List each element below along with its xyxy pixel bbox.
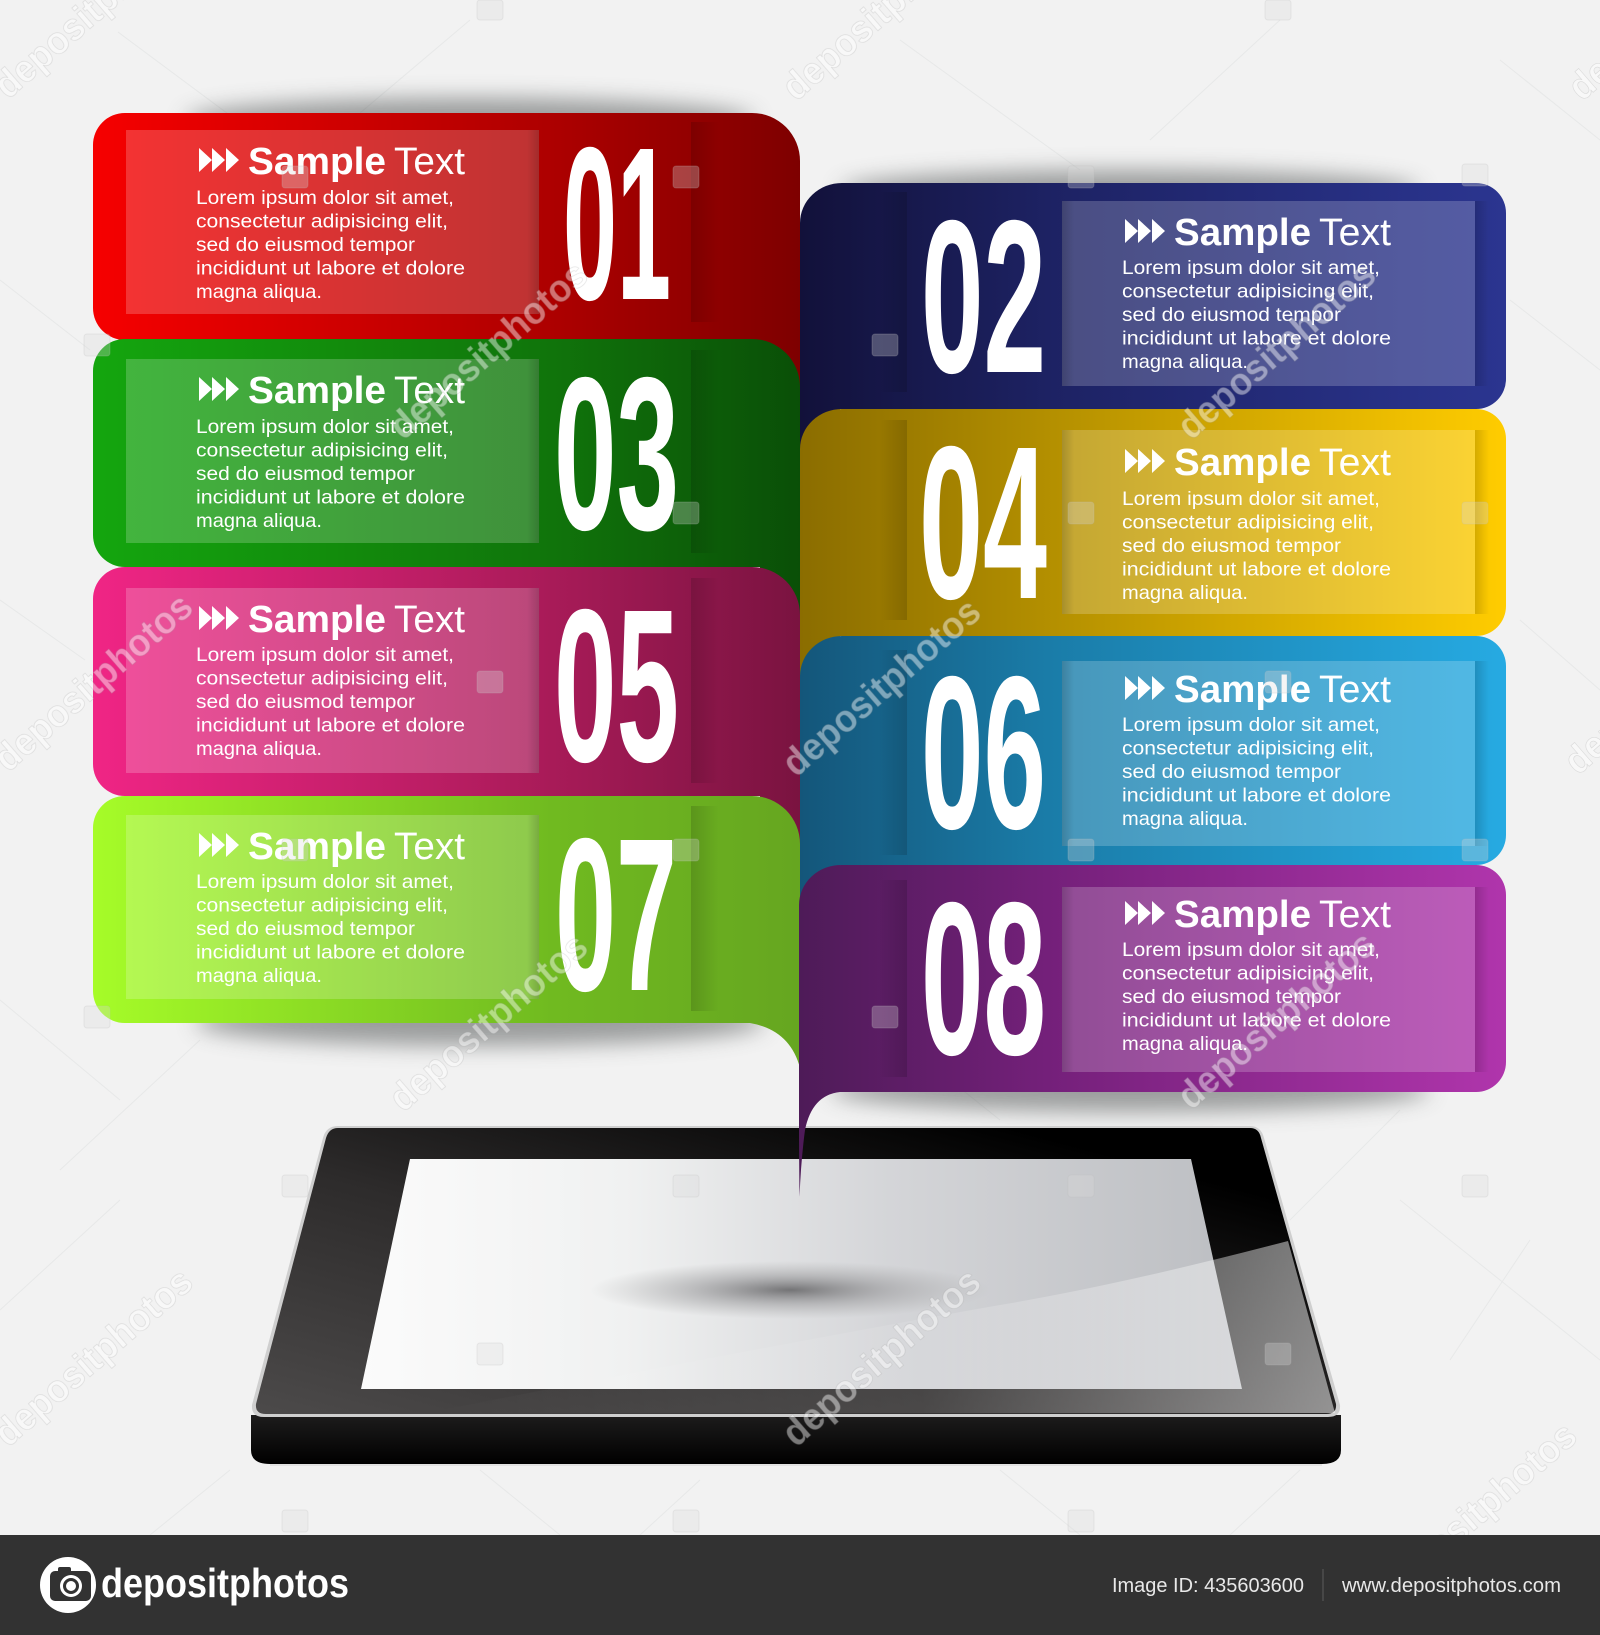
tablet screen bbox=[361, 1159, 1242, 1389]
watermarks: depositphotos bbox=[1169, 253, 1384, 448]
body text: Lorem ipsum dolor sit amet, bbox=[196, 644, 454, 666]
footer bar bbox=[0, 1535, 1600, 1635]
left card 03 bbox=[93, 333, 800, 630]
body text: consectetur adipisicing elit, bbox=[196, 894, 448, 916]
arrows icon bbox=[1125, 676, 1165, 700]
body text: magna aliqua. bbox=[1122, 1033, 1248, 1055]
body text: consectetur adipisicing elit, bbox=[1122, 962, 1374, 984]
right card 08 with tail bbox=[799, 858, 1506, 1197]
body text: magna aliqua. bbox=[1122, 351, 1248, 373]
heading: Text bbox=[1319, 669, 1391, 711]
tablet face bbox=[252, 1126, 1340, 1417]
arrows icon bbox=[1125, 219, 1165, 243]
body text: consectetur adipisicing elit, bbox=[196, 440, 448, 462]
heading: Sample bbox=[1174, 669, 1311, 711]
arrows icon bbox=[199, 833, 239, 857]
screen shadow bbox=[590, 1261, 990, 1319]
body text: incididunt ut labore et dolore bbox=[1122, 784, 1391, 806]
heading: Sample bbox=[248, 599, 386, 641]
body text: incididunt ut labore et dolore bbox=[196, 942, 465, 964]
text panel 06 bbox=[1062, 661, 1475, 846]
body text: incididunt ut labore et dolore bbox=[1122, 1010, 1391, 1032]
body text: consectetur adipisicing elit, bbox=[1122, 512, 1374, 534]
watermarks: depositphotos bbox=[774, 1260, 989, 1455]
body text: magna aliqua. bbox=[1122, 808, 1248, 830]
body text: Lorem ipsum dolor sit amet, bbox=[196, 187, 454, 209]
text panel 01 bbox=[126, 130, 539, 314]
body text: sed do eiusmod tempor bbox=[196, 463, 416, 485]
heading: Sample bbox=[248, 826, 386, 868]
body text: magna aliqua. bbox=[1122, 582, 1248, 604]
screen reflection bbox=[426, 1241, 1335, 1413]
body text: Lorem ipsum dolor sit amet, bbox=[196, 871, 454, 893]
body text: Lorem ipsum dolor sit amet, bbox=[1122, 257, 1380, 279]
heading: Sample bbox=[1174, 442, 1311, 484]
number 04: 04 bbox=[919, 402, 1047, 645]
body text: consectetur adipisicing elit, bbox=[196, 210, 448, 232]
body text: consectetur adipisicing elit, bbox=[1122, 280, 1374, 302]
body text: magna aliqua. bbox=[196, 510, 322, 532]
body text: sed do eiusmod tempor bbox=[196, 234, 416, 256]
watermarks: depositphotos bbox=[1169, 923, 1384, 1118]
heading: Sample bbox=[248, 141, 386, 183]
tablet bbox=[251, 1126, 1341, 1465]
body text: incididunt ut labore et dolore bbox=[196, 486, 465, 508]
number 03: 03 bbox=[554, 333, 679, 576]
number 08: 08 bbox=[921, 858, 1046, 1101]
text panel 02 bbox=[1062, 201, 1475, 386]
heading: Text bbox=[1319, 212, 1391, 254]
body text: incididunt ut labore et dolore bbox=[196, 258, 465, 280]
arrows icon bbox=[199, 606, 239, 630]
tablet base bbox=[251, 1415, 1341, 1464]
body text: sed do eiusmod tempor bbox=[196, 691, 416, 713]
body text: incididunt ut labore et dolore bbox=[196, 714, 465, 736]
right card 02 bbox=[800, 176, 1506, 470]
body text: sed do eiusmod tempor bbox=[1122, 761, 1342, 783]
heading: Sample bbox=[1174, 212, 1311, 254]
left card 01 bbox=[93, 103, 800, 400]
left card 07 with tail bbox=[93, 794, 800, 1068]
body text: magna aliqua. bbox=[196, 281, 322, 303]
watermarks: depositphotos bbox=[1370, 1414, 1585, 1609]
body text: sed do eiusmod tempor bbox=[1122, 986, 1342, 1008]
body text: sed do eiusmod tempor bbox=[1122, 535, 1342, 557]
text panel 07 bbox=[126, 815, 539, 999]
watermarks: depositphotos bbox=[381, 253, 596, 448]
right card 06 bbox=[800, 632, 1506, 930]
body text: sed do eiusmod tempor bbox=[1122, 304, 1342, 326]
number 02: 02 bbox=[921, 176, 1046, 419]
heading: Sample bbox=[1174, 894, 1311, 936]
body text: Lorem ipsum dolor sit amet, bbox=[1122, 714, 1380, 736]
arrows icon bbox=[1125, 901, 1165, 925]
body text: consectetur adipisicing elit, bbox=[196, 668, 448, 690]
logo wordmark: depositphotos bbox=[101, 1560, 349, 1606]
body text: incididunt ut labore et dolore bbox=[1122, 328, 1391, 350]
text panel 05 bbox=[126, 588, 539, 773]
left card 01: 01 bbox=[563, 103, 671, 346]
body text: Lorem ipsum dolor sit amet, bbox=[196, 416, 454, 438]
left card 05 bbox=[93, 565, 800, 860]
heading: Text bbox=[394, 370, 465, 412]
heading: Text bbox=[1319, 894, 1391, 936]
watermarks: depositphotos bbox=[381, 925, 596, 1120]
number 05: 05 bbox=[554, 565, 679, 808]
arrows icon bbox=[199, 377, 239, 401]
body text: consectetur adipisicing elit, bbox=[1122, 738, 1374, 760]
watermarks: depositphotos bbox=[774, 590, 989, 785]
heading: Sample bbox=[248, 370, 386, 412]
body text: magna aliqua. bbox=[196, 965, 322, 987]
body text: Lorem ipsum dolor sit amet, bbox=[1122, 939, 1380, 961]
body text: incididunt ut labore et dolore bbox=[1122, 558, 1391, 580]
text panel 08 bbox=[1062, 887, 1475, 1072]
heading: Text bbox=[394, 141, 465, 183]
number 06: 06 bbox=[921, 632, 1046, 875]
drop shadows behind cards bbox=[185, 98, 1430, 1112]
website: www.depositphotos.com bbox=[1341, 1575, 1561, 1597]
number 07: 07 bbox=[555, 794, 677, 1037]
heading: Text bbox=[394, 599, 465, 641]
body text: Lorem ipsum dolor sit amet, bbox=[1122, 488, 1380, 510]
text panel 03 bbox=[126, 359, 539, 543]
body text: sed do eiusmod tempor bbox=[196, 918, 416, 940]
body text: magna aliqua. bbox=[196, 738, 322, 760]
text panel 04 bbox=[1062, 430, 1475, 614]
logo icon bbox=[40, 1557, 96, 1613]
heading: Text bbox=[394, 826, 465, 868]
image id: Image ID: 435603600 bbox=[1112, 1575, 1304, 1597]
arrows icon bbox=[199, 148, 239, 172]
heading: Text bbox=[1319, 442, 1391, 484]
arrows icon bbox=[1125, 449, 1165, 473]
right card 04 bbox=[800, 402, 1506, 700]
